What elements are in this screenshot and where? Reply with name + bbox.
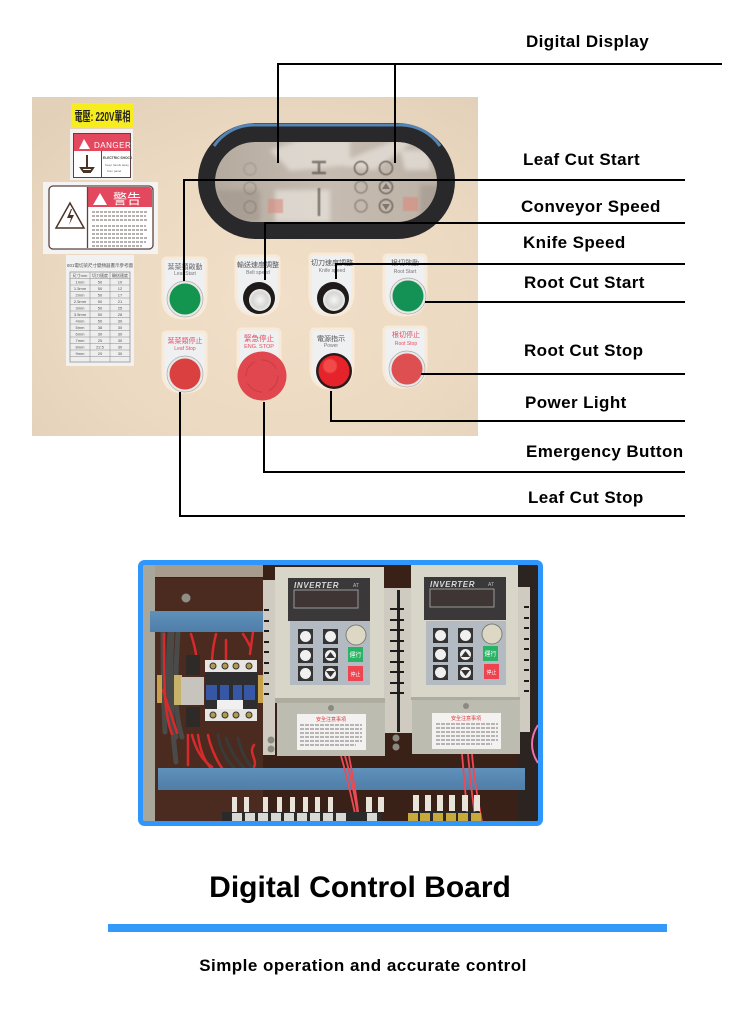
sticker: parameter table: 25 (118, 306, 123, 310)
sticker: warning: 警告 (113, 191, 141, 207)
button: root stop (384, 327, 426, 387)
knob: belt speed: Belt speed (246, 270, 270, 276)
button: leaf start: Leaf Start (174, 271, 196, 277)
sticker: parameter table: 4mm (76, 318, 85, 324)
sticker: parameter table: 50 (98, 280, 103, 284)
bottom wires (341, 754, 482, 822)
button: root stop: 根切停止 (392, 330, 420, 339)
sticker: parameter table: 6mm (76, 332, 85, 336)
photo: inverter cabinet (140, 562, 540, 824)
label: Conveyor Speed: Conveyor Speed (521, 197, 661, 216)
button: leaf stop (163, 332, 206, 392)
knob: knife speed (310, 254, 353, 315)
sticker: parameter table: 21 (118, 299, 123, 304)
sticker: danger (70, 129, 133, 180)
button: leaf stop: Leaf Stop (174, 346, 196, 352)
button: root start: 根切啟動 (391, 258, 419, 267)
pink loop wire (532, 725, 538, 763)
sticker: parameter table: 50 (98, 306, 103, 310)
button: leaf stop: 葉菜類停止 (168, 336, 202, 345)
photo blue frame (140, 562, 540, 824)
sticker: parameter table: 尺寸mm (73, 272, 88, 278)
cable ducts (150, 611, 263, 632)
indicator: power light: 電源指示 (317, 334, 345, 343)
subtitle: Simple operation and accurate control (199, 956, 527, 975)
sticker: parameter table: 切刀速度 (92, 272, 108, 278)
sticker: danger: DANGER (94, 141, 131, 150)
sticker: parameter table: 10 (118, 280, 123, 284)
left inverter: AT (353, 583, 359, 589)
sticker: warning (43, 182, 158, 254)
sticker: parameter table: 輸送速度 (112, 272, 128, 278)
button: emergency stop: ENG. STOP (244, 344, 274, 350)
sticker: parameter table: 30 (118, 338, 123, 343)
sticker: parameter table: 30 (118, 351, 123, 356)
sticker: parameter table: 12 (118, 286, 123, 291)
leader lines (180, 64, 722, 516)
sticker: parameter table: 3mm (76, 306, 85, 310)
sticker: parameter table: 30 (118, 325, 123, 330)
digital display window (198, 123, 455, 239)
sticker: parameter table: 2mm (76, 292, 85, 298)
sticker: parameter table: 20 (98, 351, 103, 356)
right inverter: INVERTER (430, 580, 475, 589)
sticker: parameter table: 30 (118, 318, 123, 324)
sticker: parameter table: 7mm (76, 338, 85, 343)
sticker: parameter table: 30 (118, 332, 123, 336)
photo: control panel (32, 97, 478, 436)
sticker: parameter table: 1.5mm (74, 286, 87, 291)
wiring (163, 632, 255, 768)
knob: knife speed: 切刀速度調整 (311, 258, 353, 267)
label: Power Light: Power Light (525, 393, 627, 412)
left inverter (275, 567, 385, 756)
sticker: parameter table: 38 (98, 325, 103, 330)
sticker: parameter table: 50 (98, 318, 103, 324)
left inverter: 安全注意事項 (316, 716, 346, 723)
indicator: power light: Power (324, 343, 338, 349)
sticker: parameter table: 50 (98, 312, 103, 317)
label: Leaf Cut Stop: Leaf Cut Stop (528, 488, 644, 507)
sticker: parameter table: 50 (98, 292, 103, 298)
label: Root Cut Start: Root Cut Start (524, 273, 645, 292)
button: emergency stop: 緊急停止 (244, 333, 274, 343)
label: Knife Speed: Knife Speed (523, 233, 626, 252)
button: emergency stop (238, 329, 286, 400)
sticker: parameter table: 2.5mm (74, 299, 87, 304)
right inverter: 運行 (484, 650, 497, 658)
label: Emergency Button: Emergency Button (526, 442, 684, 461)
right inverter: 停止 (486, 669, 497, 676)
din rails (263, 580, 275, 755)
sticker: parameter table: 50 (98, 286, 103, 291)
left inverter: INVERTER (294, 581, 339, 590)
sticker: voltage label (71, 103, 134, 128)
label: Leaf Cut Start: Leaf Cut Start (523, 150, 640, 169)
sticker: parameter table: 30 (98, 332, 103, 336)
left inverter: 運行 (349, 651, 362, 659)
sticker: parameter table (66, 255, 134, 366)
button: leaf start (163, 258, 206, 318)
knob: knife speed: Knife speed (319, 268, 345, 274)
sticker: parameter table: 25 (98, 338, 103, 343)
sticker: parameter table: 28 (118, 312, 123, 317)
title: Digital Control Board (209, 871, 511, 904)
sticker: voltage label: 電壓: 220V單相 (74, 109, 130, 124)
button: leaf start: 葉菜類啟動 (168, 262, 202, 271)
right inverter: AT (488, 582, 494, 588)
sticker: parameter table: 1mm (76, 280, 85, 284)
sticker: parameter table: 50 (98, 299, 103, 304)
sticker: parameter table: 17 (118, 292, 123, 298)
terminal blocks (222, 812, 382, 822)
knob: belt speed (236, 256, 279, 315)
sticker: parameter table: 9mm (76, 351, 85, 356)
sticker: parameter table: 801電切菜尺寸變頻器晝示參考圖 (67, 262, 133, 269)
sticker: danger: from panel (107, 169, 122, 173)
right inverter (411, 565, 520, 754)
button: root start: Root Start (394, 269, 417, 275)
sticker: parameter table: 3.5mm (74, 312, 87, 317)
indicator: power light (311, 329, 353, 389)
knob: belt speed: 輸送速度調整 (237, 260, 279, 269)
relay and contactor (157, 675, 162, 703)
sticker: parameter table: 30 (118, 344, 123, 350)
blue divider bar (108, 924, 667, 932)
left inverter: 停止 (350, 671, 361, 678)
sticker: parameter table: 8mm (76, 344, 85, 350)
right inverter: 安全注意事項 (451, 715, 481, 722)
button: root stop: Root Stop (395, 341, 417, 347)
sticker: danger: Keep hands away (105, 163, 129, 167)
sticker: danger: ELECTRIC SHOCK (103, 156, 133, 160)
label: Digital Display: Digital Display (526, 32, 649, 51)
sticker: parameter table: 22.5 (96, 344, 105, 350)
sticker: parameter table: 5mm (76, 325, 85, 330)
button: root start (384, 255, 426, 315)
label: Root Cut Stop: Root Cut Stop (524, 341, 643, 360)
